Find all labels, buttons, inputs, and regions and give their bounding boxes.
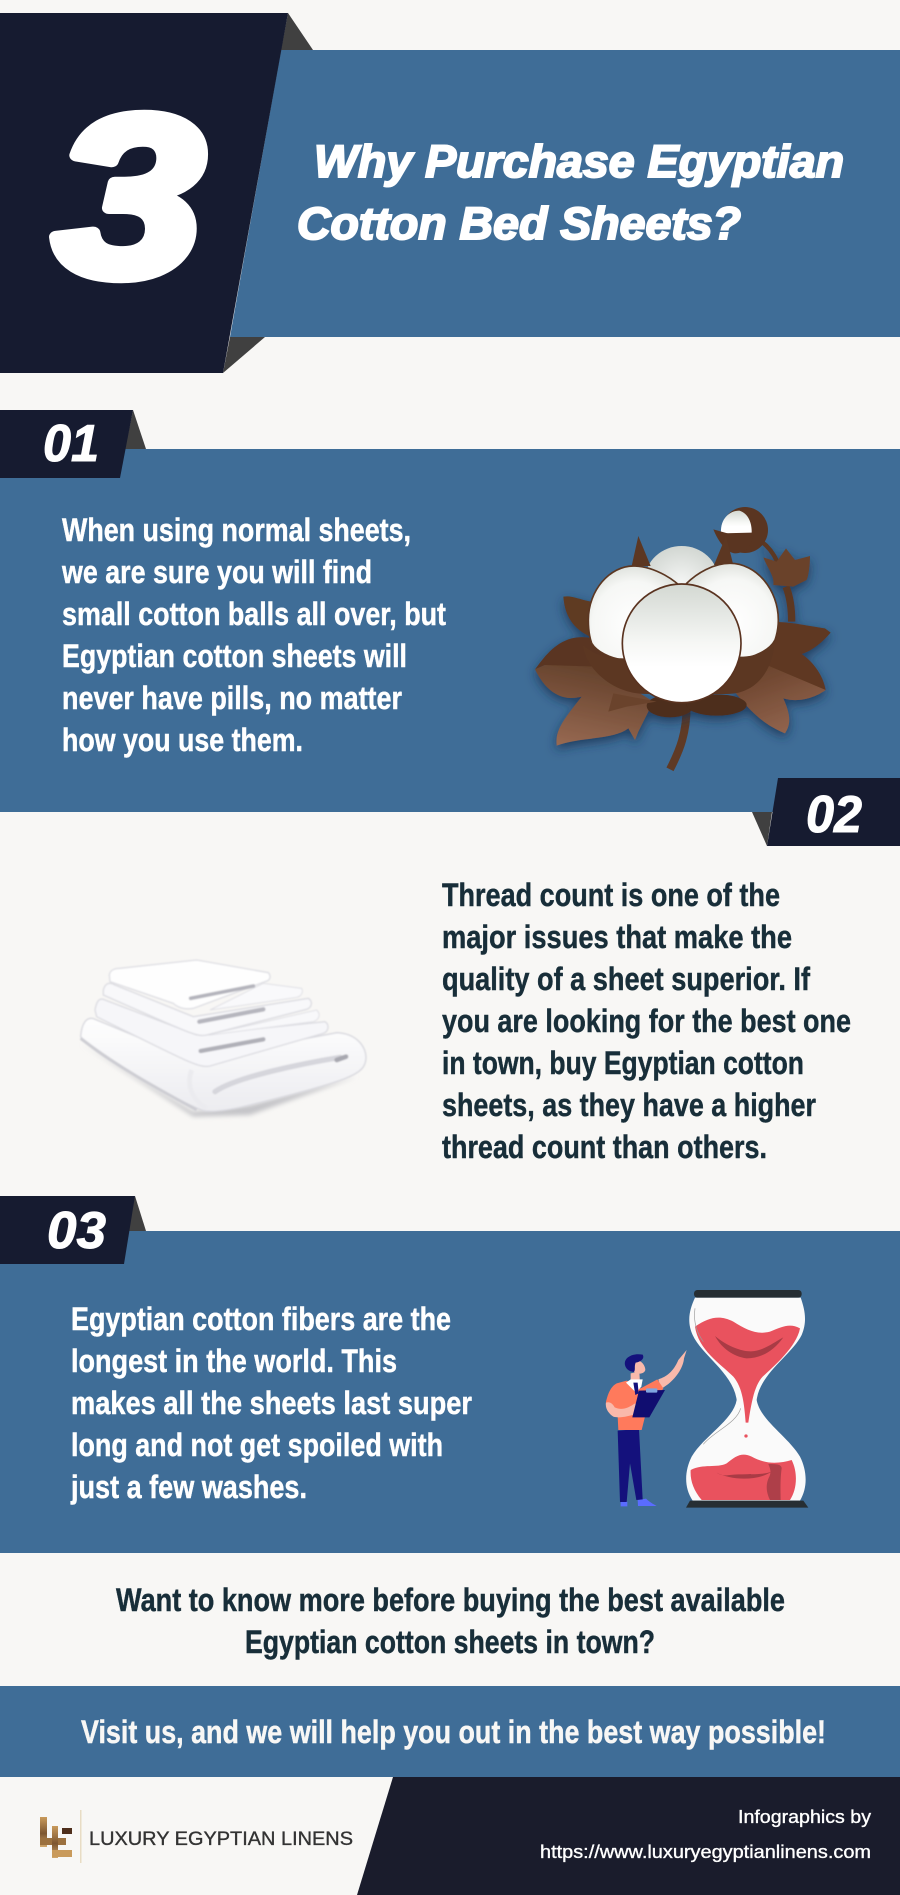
fold: bottom triangle xyxy=(223,337,265,373)
panel: 01 xyxy=(0,410,900,812)
text block 02: quality of a sheet superior. If xyxy=(442,961,810,997)
logo wordmark: LUXURY EGYPTIAN LINENS xyxy=(89,1829,353,1850)
text block 01: never have pills, no matter xyxy=(62,680,402,716)
text block 02: Thread count is one of the xyxy=(442,877,780,913)
logo divider xyxy=(80,1810,82,1863)
footer xyxy=(40,1777,900,1895)
header banner xyxy=(0,13,900,373)
badge shape xyxy=(767,778,900,846)
icon: hourglass xyxy=(606,1290,808,1508)
text block 02: thread count than others. xyxy=(442,1129,767,1165)
text block 02: major issues that make the xyxy=(442,919,792,955)
dark number panel xyxy=(0,13,288,373)
number 02: 02 xyxy=(806,786,862,844)
text block 01 xyxy=(61,512,446,758)
call to action question: Egyptian cotton sheets in town? xyxy=(245,1624,655,1660)
badge 01: 01 xyxy=(43,415,99,473)
text block 02 xyxy=(442,877,851,1165)
text block 01: When using normal sheets, xyxy=(62,512,411,548)
text block 03: long and not get spoiled with xyxy=(71,1427,443,1463)
badge 03: 03 xyxy=(47,1202,106,1260)
icon: folded towels xyxy=(81,960,366,1117)
text block 03 xyxy=(70,1301,472,1505)
panel background xyxy=(0,449,900,812)
blue title band xyxy=(230,50,900,337)
footer dark panel xyxy=(357,1777,900,1895)
figure: man with clipboard xyxy=(606,1350,687,1506)
badge 01 xyxy=(0,410,133,478)
text block 01: how you use them. xyxy=(62,722,303,758)
badge fold xyxy=(752,812,772,846)
text block 01: small cotton balls all over, but xyxy=(62,596,446,632)
logo xyxy=(40,1810,353,1863)
call to action question: Want to know more before buying the best available xyxy=(116,1582,785,1618)
footer credit: Infographics by xyxy=(738,1806,872,1827)
title: Why Purchase Egyptian xyxy=(314,136,844,187)
footer credit: https://www.luxuryegyptianlinens.com xyxy=(540,1841,871,1862)
panel: 03 xyxy=(0,1196,900,1553)
text block 03: just a few washes. xyxy=(70,1469,307,1505)
title xyxy=(297,136,844,249)
text block 01: Egyptian cotton sheets will xyxy=(62,638,407,674)
fold: top triangle xyxy=(281,13,313,50)
logo mark xyxy=(40,1817,72,1858)
badge fold xyxy=(125,1196,146,1231)
text block 03: Egyptian cotton fibers are the xyxy=(71,1301,451,1337)
panel background xyxy=(0,1231,900,1553)
text block 03: longest in the world. This xyxy=(71,1343,397,1379)
call to action question xyxy=(116,1582,785,1660)
big number 3: 3 xyxy=(54,70,204,324)
badge 03 xyxy=(0,1196,135,1264)
band: visit us xyxy=(0,1686,900,1777)
text block 02: in town, buy Egyptian cotton xyxy=(442,1045,804,1081)
footer credit xyxy=(540,1806,872,1862)
badge fold xyxy=(125,410,146,449)
title: Cotton Bed Sheets? xyxy=(297,198,741,249)
icon: cotton boll xyxy=(535,507,831,769)
text block 03: makes all the sheets last super xyxy=(71,1385,472,1421)
badge 02 xyxy=(752,778,900,846)
text block 02: sheets, as they have a higher xyxy=(442,1087,816,1123)
text block 01: we are sure you will find xyxy=(61,554,372,590)
